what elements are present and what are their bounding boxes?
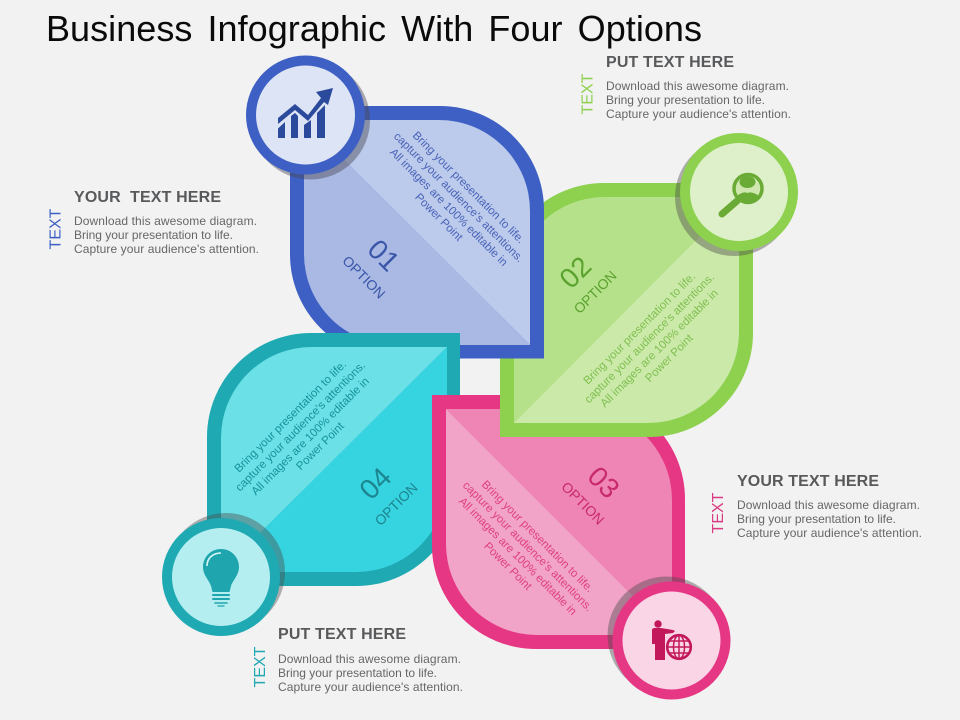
- callout: option 02 text: [580, 54, 791, 121]
- option 04 description: Bring your presentation to life.: [233, 359, 349, 475]
- option 03 description: capture your audience's attentions.: [460, 480, 594, 614]
- icon: light bulb: [203, 549, 239, 606]
- option 01 description: Power Point: [412, 191, 465, 244]
- body: [737, 498, 922, 540]
- option 03 description: All images are 100% editable in: [456, 495, 579, 618]
- option 04 description: capture your audience's attentions.: [234, 360, 368, 494]
- callout: option 03 text: [710, 473, 922, 540]
- option 02 description: Bring your presentation to life.: [582, 271, 698, 387]
- option 01 label: OPTION: [339, 252, 389, 302]
- body: Capture your audience's attention.: [278, 680, 463, 694]
- heading: YOUR TEXT HERE: [74, 189, 221, 206]
- option 03 description: Power Point: [481, 540, 534, 593]
- heading: PUT TEXT HERE: [606, 54, 734, 71]
- body: [278, 652, 463, 694]
- body: Capture your audience's attention.: [737, 526, 922, 540]
- option 02 number: 02: [553, 250, 597, 294]
- body: Capture your audience's attention.: [74, 242, 259, 256]
- option 03 number: 03: [582, 460, 626, 504]
- heading: PUT TEXT HERE: [278, 626, 406, 643]
- vertical label: TEXT: [580, 73, 596, 114]
- title: Business Infographic With Four Options: [46, 8, 702, 49]
- body: Bring your presentation to life.: [737, 512, 896, 526]
- option 04 description: [224, 350, 388, 514]
- panel: option 01 petal: [290, 106, 544, 358]
- body: Download this awesome diagram.: [74, 214, 257, 228]
- body: Download this awesome diagram.: [737, 498, 920, 512]
- body: Download this awesome diagram.: [278, 652, 461, 666]
- body: Capture your audience's attention.: [606, 107, 791, 121]
- option 04 number: 04: [353, 461, 397, 505]
- option 02 description: [573, 262, 737, 426]
- option 03 label: OPTION: [558, 478, 608, 528]
- panel: option 03 overlap edge over option 04: [432, 395, 461, 617]
- option 02 description: capture your audience's attentions.: [583, 272, 717, 406]
- badge: option 02: [675, 133, 798, 256]
- option 01 description: All images are 100% editable in: [387, 146, 510, 269]
- body: Bring your presentation to life.: [278, 666, 437, 680]
- icon: presenter with globe: [652, 620, 691, 660]
- body: Download this awesome diagram.: [606, 79, 789, 93]
- panel: option 03 petal: [432, 395, 685, 649]
- vertical label: TEXT: [710, 492, 727, 533]
- body: [606, 79, 791, 121]
- option 03 description: Bring your presentation to life.: [479, 479, 595, 595]
- option 04 description: Power Point: [294, 420, 347, 473]
- option 01 description: capture your audience's attentions.: [391, 131, 525, 265]
- option 01 number: 01: [362, 233, 406, 277]
- option 02 label: OPTION: [570, 267, 620, 317]
- option 02 description: Power Point: [643, 332, 696, 385]
- option 04 label: OPTION: [371, 479, 421, 529]
- callout: option 04 text: [252, 626, 463, 694]
- panel: option 04 petal: [207, 333, 460, 586]
- option 03 description: [440, 470, 604, 634]
- badge: option 01: [246, 56, 370, 180]
- callout: option 01 text: [48, 189, 259, 256]
- option 01 description: Bring your presentation to life.: [410, 130, 526, 246]
- body: Bring your presentation to life.: [606, 93, 765, 107]
- icon: magnifier with person: [722, 174, 762, 214]
- icon: rising bar chart: [278, 88, 333, 138]
- body: [74, 214, 259, 256]
- option 01 description: [371, 121, 535, 285]
- vertical label: TEXT: [252, 646, 269, 687]
- badge: option 04: [162, 513, 285, 636]
- option 02 description: All images are 100% editable in: [598, 287, 721, 410]
- vertical label: TEXT: [48, 208, 64, 249]
- body: Bring your presentation to life.: [74, 228, 233, 242]
- panel: option 02 petal: [500, 183, 753, 437]
- heading: YOUR TEXT HERE: [737, 473, 879, 490]
- option 04 description: All images are 100% editable in: [249, 375, 372, 498]
- badge: option 03: [608, 576, 730, 700]
